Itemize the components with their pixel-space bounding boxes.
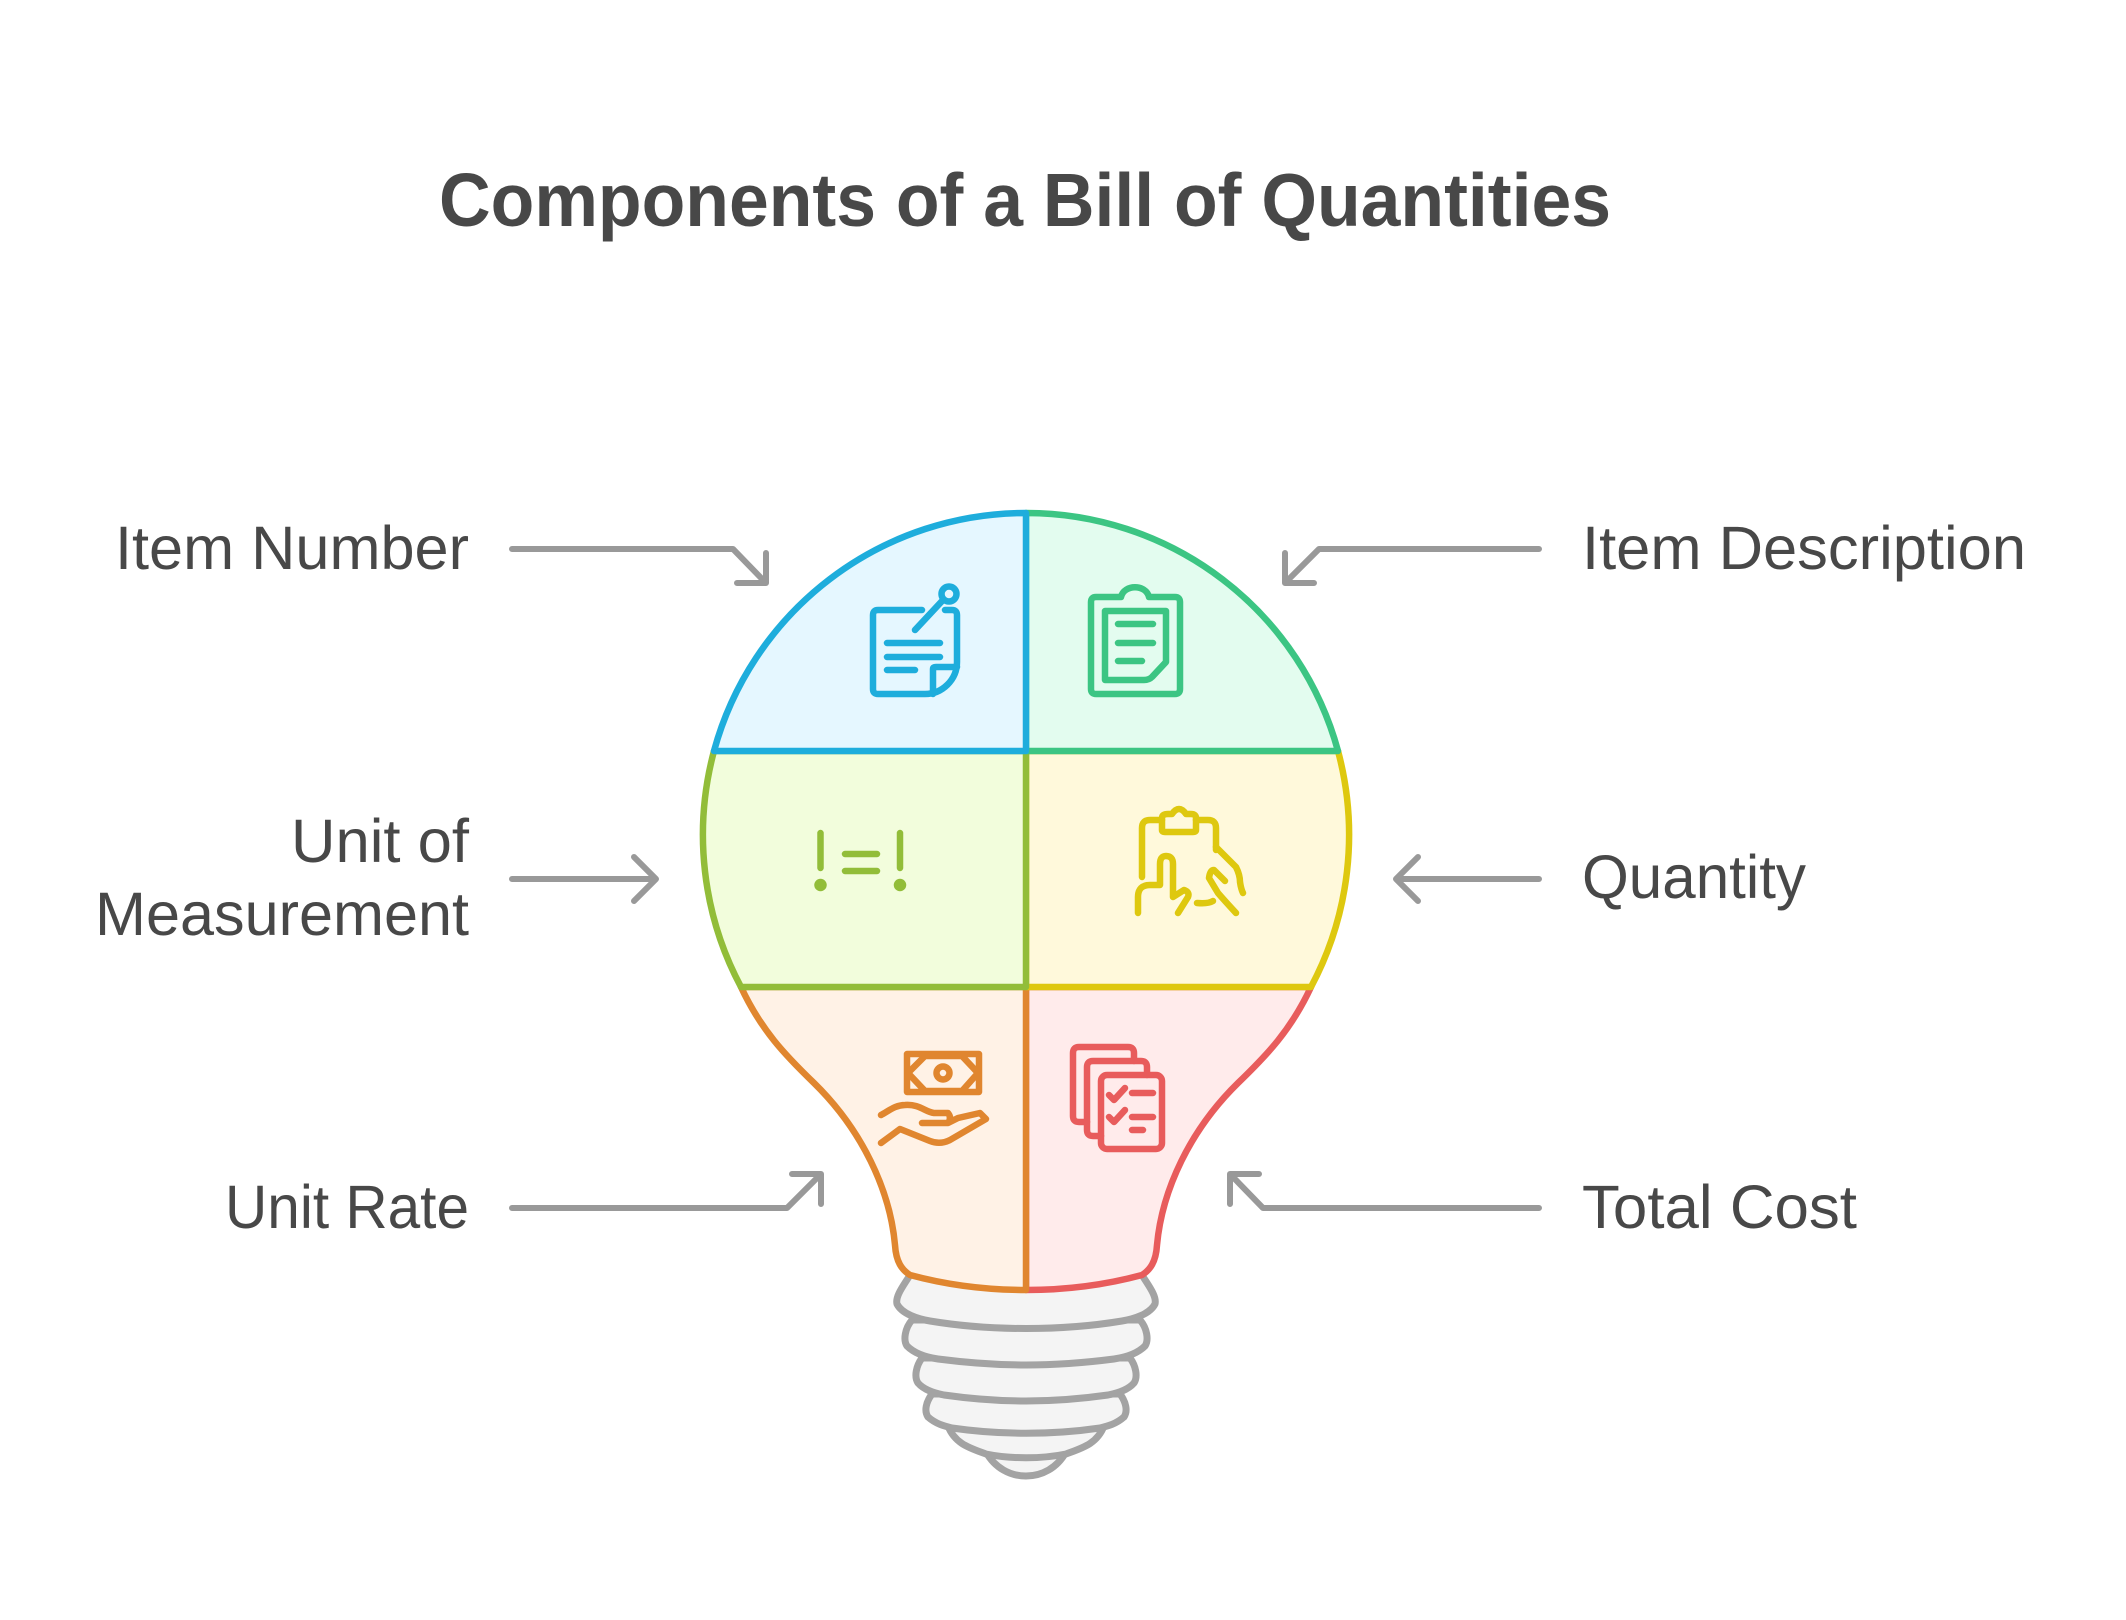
icon: hand holding clipboard xyxy=(1138,809,1243,913)
arrow: unit rate xyxy=(512,1174,821,1208)
arrow: total cost xyxy=(1230,1174,1539,1208)
label: unit of measurement xyxy=(95,807,470,948)
label: total cost: Total Cost xyxy=(1582,1173,1857,1241)
segment: item description xyxy=(1026,513,1338,751)
icon: clipboard xyxy=(1091,587,1180,694)
icon: not-equal marks xyxy=(818,833,903,888)
label: item number: Item Number xyxy=(115,514,469,582)
icon: note with pin xyxy=(873,586,957,694)
segment: unit rate xyxy=(741,987,1026,1290)
arrow: unit of measurement xyxy=(512,857,656,901)
label: unit of measurement: Unit of xyxy=(291,807,470,875)
segment: item number xyxy=(714,513,1026,751)
segment: unit of measurement xyxy=(703,751,1026,987)
label: quantity: Quantity xyxy=(1582,843,1806,911)
label: item description: Item Description xyxy=(1582,514,2026,582)
title: Components of a Bill of Quantities xyxy=(439,158,1611,242)
segment: quantity xyxy=(1026,751,1349,987)
bulb screw base xyxy=(897,1275,1155,1476)
arrow: item description xyxy=(1285,549,1539,583)
segment: total cost xyxy=(1026,987,1311,1290)
arrow: quantity xyxy=(1396,857,1539,901)
label: unit rate: Unit Rate xyxy=(225,1173,469,1241)
label: unit of measurement: Measurement xyxy=(95,880,469,948)
icon: money in hand xyxy=(881,1054,986,1143)
icon: stacked checklists xyxy=(1073,1047,1162,1149)
arrow: item number xyxy=(512,549,766,583)
light bulb diagram xyxy=(703,513,1349,1476)
